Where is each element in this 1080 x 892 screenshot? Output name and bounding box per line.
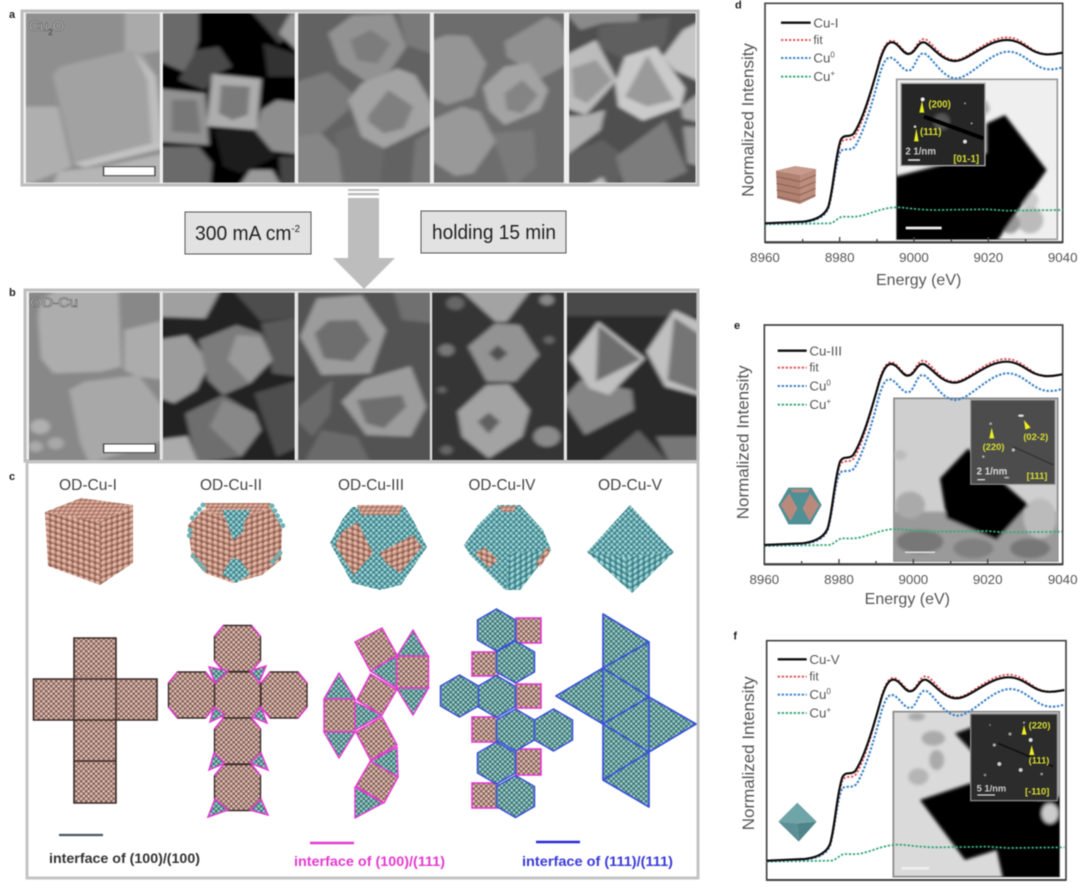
SAED inset e: (220) bbox=[983, 442, 1004, 452]
legend e bbox=[778, 343, 842, 412]
y axis title f: Normalized Intensity bbox=[739, 676, 758, 830]
x tick labels e bbox=[750, 572, 1077, 587]
SAED inset f: [-110] bbox=[1025, 786, 1049, 796]
legend f bbox=[778, 652, 840, 720]
SAED inset e: 2 1/nm bbox=[977, 466, 1007, 477]
SAED inset e: (02-2) bbox=[1023, 432, 1048, 442]
legend f: + bbox=[826, 705, 831, 714]
model OD-Cu-V: octahedron bbox=[587, 505, 674, 593]
SAED inset d: (200) bbox=[928, 100, 951, 111]
panel f: XANES chart Cu-V bbox=[733, 630, 1066, 880]
legend e: Cu bbox=[809, 378, 826, 393]
axes frame e bbox=[764, 325, 1063, 564]
panel label e: e bbox=[734, 320, 740, 332]
x tick labels d: 8960 bbox=[750, 250, 780, 265]
x tick labels e: 9000 bbox=[899, 572, 928, 587]
legend f: fit bbox=[809, 670, 819, 684]
axes frame d bbox=[765, 3, 1063, 242]
panel label f: f bbox=[733, 630, 737, 642]
panel label b: b bbox=[9, 287, 16, 299]
mini cube icon d bbox=[776, 166, 816, 204]
title OD-Cu-I: OD-Cu-I bbox=[59, 477, 117, 494]
spectra curves d bbox=[765, 37, 1063, 224]
condition box: holding time bbox=[421, 211, 566, 253]
image separators a bbox=[161, 12, 567, 184]
legend: interface 100/111: interface of (100)/(111) bbox=[294, 853, 445, 869]
SEM image b2: truncated cubes bbox=[156, 289, 299, 465]
panel c: crystal models and nets bbox=[27, 462, 698, 878]
SAED inset d: (111) bbox=[920, 127, 941, 138]
net OD-Cu-IV bbox=[440, 609, 572, 818]
SEM image a1: cube bbox=[22, 10, 165, 187]
panel label c: c bbox=[9, 471, 15, 483]
title OD-Cu-V: OD-Cu-V bbox=[598, 477, 662, 494]
y axis title d: Normalized Intensity bbox=[738, 43, 757, 197]
legend e: Cu-III bbox=[809, 343, 842, 358]
mini octahedron icon f bbox=[778, 803, 817, 842]
spectra curves f bbox=[767, 675, 1064, 862]
legend e: 0 bbox=[826, 378, 831, 387]
legend d: + bbox=[830, 69, 835, 78]
SEM image b4: truncated octahedra bbox=[426, 289, 569, 463]
legend f: Cu bbox=[809, 705, 826, 720]
SAED inset d bbox=[901, 83, 985, 166]
title OD-Cu-III: OD-Cu-III bbox=[338, 477, 404, 494]
legend d: Cu-I bbox=[813, 15, 839, 30]
SEM image a2: truncated cubes bbox=[162, 12, 296, 184]
condition box: current density: -2 bbox=[291, 224, 300, 235]
x tick labels e: 9020 bbox=[973, 572, 1002, 587]
x tick labels e: 8980 bbox=[824, 572, 854, 587]
x tick labels d bbox=[750, 250, 1077, 265]
SEM image a3: cuboctahedra bbox=[298, 12, 431, 184]
sample label Cu2O: O bbox=[53, 18, 64, 35]
net OD-Cu-III bbox=[324, 628, 428, 818]
legend d: 0 bbox=[830, 50, 835, 59]
TEM inset f bbox=[893, 712, 1062, 880]
condition box: current density: 300 mA cm bbox=[195, 223, 295, 245]
condition box: holding time: holding 15 min bbox=[432, 222, 556, 244]
SAED inset f: 5 1/nm bbox=[977, 783, 1006, 793]
panel a: Cu2O SEM image strip bbox=[22, 10, 703, 190]
SAED inset e bbox=[971, 400, 1055, 484]
x tick labels d: 9020 bbox=[974, 250, 1003, 265]
sample label Cu2O: Cu bbox=[29, 18, 48, 35]
TEM inset e bbox=[890, 398, 1060, 565]
mini cuboctahedron icon e bbox=[778, 488, 822, 524]
legend d bbox=[781, 15, 839, 84]
panel d: XANES chart Cu-I bbox=[735, 0, 1077, 289]
legend d: Cu bbox=[813, 50, 830, 65]
title OD-Cu-II: OD-Cu-II bbox=[200, 477, 262, 494]
panel label a: a bbox=[9, 9, 16, 21]
legend f: Cu-V bbox=[809, 652, 840, 667]
SEM image b5: octahedra bbox=[562, 289, 703, 463]
x tick labels d: 9000 bbox=[899, 250, 929, 265]
SEM image a5: octahedra bbox=[568, 12, 696, 184]
x tick labels d: 9040 bbox=[1048, 250, 1077, 265]
legend e: fit bbox=[809, 361, 819, 375]
SAED inset f: (220) bbox=[1029, 721, 1050, 731]
model OD-Cu-III: cuboctahedron bbox=[330, 505, 427, 590]
image separators b bbox=[162, 291, 566, 460]
panel b: OD-Cu SEM image strip bbox=[25, 289, 703, 465]
spectra curves e bbox=[764, 359, 1062, 546]
process arrow bbox=[333, 189, 395, 289]
SAED inset d: 2 1/nm bbox=[905, 147, 936, 158]
net OD-Cu-V bbox=[556, 614, 696, 807]
legend e: Cu bbox=[809, 397, 826, 412]
y axis title e: Normalized Intensity bbox=[734, 365, 753, 519]
model OD-Cu-I: cube bbox=[45, 498, 133, 585]
panel label d: d bbox=[735, 0, 742, 12]
legend f: Cu bbox=[809, 687, 826, 702]
SAED inset d: [01-1] bbox=[953, 154, 979, 165]
net OD-Cu-II bbox=[168, 626, 307, 817]
legend e: + bbox=[826, 397, 831, 406]
legend f: 0 bbox=[826, 687, 831, 696]
SEM image b3: cuboctahedra bbox=[298, 292, 431, 461]
legend: interface 100/100: interface of (100)/(100) bbox=[49, 850, 200, 866]
SAED inset f bbox=[971, 714, 1057, 801]
SEM image a4: truncated octahedra bbox=[433, 12, 564, 184]
x tick labels d: 8980 bbox=[825, 250, 854, 265]
legend d: fit bbox=[813, 33, 823, 47]
x tick labels e: 9040 bbox=[1048, 572, 1077, 587]
SAED inset f: (111) bbox=[1029, 755, 1049, 765]
x tick labels e: 8960 bbox=[750, 572, 779, 587]
axes frame f bbox=[767, 641, 1066, 880]
title OD-Cu-IV: OD-Cu-IV bbox=[468, 477, 536, 494]
sample label Cu2O: 2 bbox=[48, 28, 53, 37]
SAED inset e: [111] bbox=[1027, 471, 1047, 481]
legend d: Cu bbox=[813, 69, 830, 84]
model OD-Cu-IV: truncated octahedron bbox=[464, 505, 551, 590]
x axis title e: Energy (eV) bbox=[865, 591, 950, 608]
TEM inset d bbox=[895, 79, 1057, 242]
legend: interface 111/111: interface of (111)/(111) bbox=[522, 853, 673, 869]
x axis title d: Energy (eV) bbox=[876, 272, 961, 289]
model OD-Cu-II: truncated cube bbox=[188, 503, 283, 583]
SEM image b1: cubes bbox=[25, 289, 165, 463]
condition box: current density bbox=[185, 212, 311, 254]
panel e: XANES chart Cu-III bbox=[734, 320, 1077, 608]
net OD-Cu-I bbox=[34, 638, 157, 803]
sample label OD-Cu: OD-Cu bbox=[30, 294, 78, 310]
